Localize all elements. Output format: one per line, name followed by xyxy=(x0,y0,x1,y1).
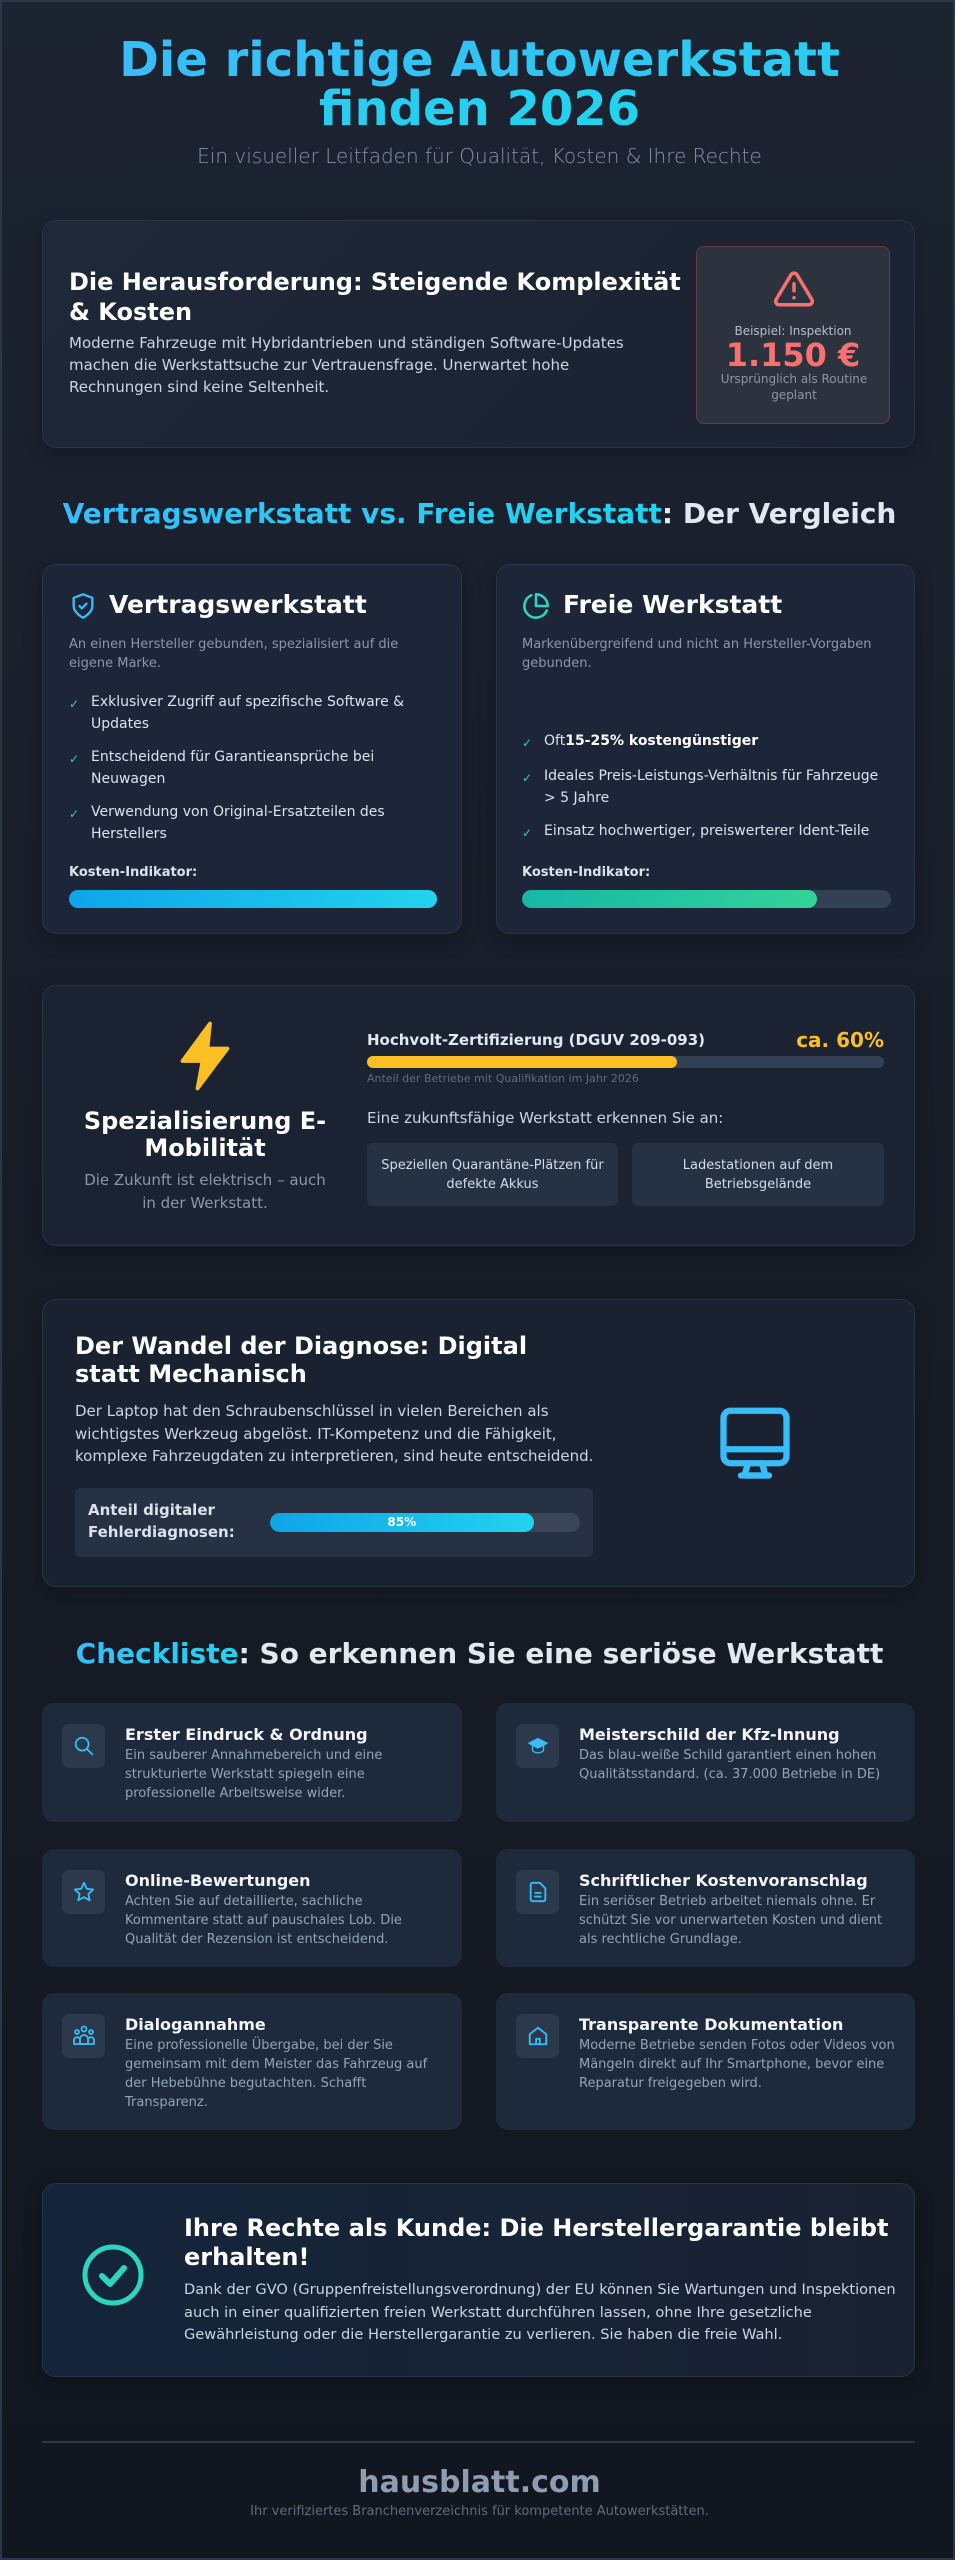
box: quarantine xyxy=(367,1143,618,1206)
panel: diagnosis xyxy=(42,1299,915,1587)
description: An einen Hersteller gebunden, spezialisiert auf die eigene Marke. xyxy=(69,637,398,671)
icon: people xyxy=(62,2014,105,2058)
checklist card: estimate xyxy=(496,1849,915,1967)
checklist card: dialogue: Dialogannahme xyxy=(125,2015,266,2034)
checklist card: master sign: Meisterschild der Kfz-Innung xyxy=(579,1725,840,1744)
challenge text: Moderne Fahrzeuge mit Hybridantrieben und ständigen Software-Updates machen die Werkstattsuche zur Vertrauensfrage. Unerwartet hohe Rechnungen sind keine Seltenheit. xyxy=(69,334,624,396)
checklist card: dialogue xyxy=(42,1993,462,2130)
subtitle: Ein visueller Leitfaden für Qualität, Kosten & Ihre Rechte xyxy=(197,144,762,168)
cost indicator xyxy=(522,865,891,908)
icon: graduation cap xyxy=(516,1724,559,1768)
checklist card: first impression: Ein sauberer Annahmebereich und eine strukturierte Werkstatt spiegeln eine professionelle Arbeitsweise wider. xyxy=(125,1748,382,1801)
icon: warning xyxy=(774,271,814,306)
checklist card: documentation: Transparente Dokumentation xyxy=(579,2015,843,2034)
callout: inspection cost: Ursprünglich als Routine geplant xyxy=(721,372,867,402)
callout: inspection cost: Beispiel: Inspektion xyxy=(734,324,852,338)
list xyxy=(524,733,878,839)
footer text: Ihr verifiziertes Branchenverzeichnis für kompetente Autowerkstätten. xyxy=(250,2504,709,2519)
chart: digital diagnosis share: 85% xyxy=(387,1515,416,1529)
diagnosis heading: Der Wandel der Diagnose: Digital statt Mechanisch xyxy=(75,1332,527,1388)
list: Einsatz hochwertiger, preiswerterer Ident-Teile xyxy=(544,823,869,839)
panel: challenge xyxy=(42,220,915,448)
checklist card: reviews: Online-Bewertungen xyxy=(125,1871,311,1890)
list: Verwendung von Original-Ersatzteilen des Herstellers xyxy=(91,804,385,842)
icon: house xyxy=(516,2014,559,2058)
checklist card: master sign: Das blau-weiße Schild garantiert einen hohen Qualitätsstandard. (ca. 37.000 Betriebe in DE) xyxy=(579,1748,880,1782)
icon: document xyxy=(516,1870,559,1914)
callout: inspection cost xyxy=(696,246,890,424)
heading: Freie Werkstatt xyxy=(563,590,782,619)
challenge heading: Die Herausforderung: Steigende Komplexität & Kosten xyxy=(69,268,681,326)
icon: check circle xyxy=(82,2244,144,2306)
checklist card: reviews: Achten Sie auf detaillierte, sachliche Kommentare statt auf pauschales Lob. Die Qualität der Rezension ist entscheidend. xyxy=(125,1894,402,1947)
list: Oft15-25% kostengünstiger xyxy=(544,733,758,749)
icon: pie chart xyxy=(523,593,549,619)
icon: star xyxy=(62,1870,105,1914)
list xyxy=(70,694,404,842)
chart: digital diagnosis share xyxy=(75,1488,593,1557)
panel: customer rights xyxy=(42,2183,915,2377)
e-mobility subtitle: Die Zukunft ist elektrisch – auch in der Werkstatt. xyxy=(84,1171,326,1212)
cost indicator: Kosten-Indikator: xyxy=(69,865,197,880)
chart: digital diagnosis share: Anteil digitaler xyxy=(88,1501,215,1519)
box: charging: Ladestationen auf dem Betriebsgelände xyxy=(683,1158,833,1192)
checklist card: estimate: Ein seriöser Betrieb arbeitet niemals ohne. Er schützt Sie vor unerwarteten Kosten und dient als rechtliche Grundlage. xyxy=(579,1894,882,1947)
checklist card: first impression: Erster Eindruck & Ordnung xyxy=(125,1725,368,1744)
diagnosis text: Der Laptop hat den Schraubenschlüssel in vielen Bereichen als wichtigstes Werkzeug abgelöst. IT-Kompetenz und die Fähigkeit, komplexe Fahrzeugdaten zu interpretieren, sind heute entscheidend. xyxy=(75,1402,593,1465)
heading: comparison: Vertragswerkstatt vs. Freie Werkstatt: Der Vergleich xyxy=(63,497,896,530)
list: Entscheidend für Garantieansprüche bei Neuwagen xyxy=(91,749,374,787)
checklist card: dialogue: Eine professionelle Übergabe, bei der Sie gemeinsam mit dem Meister das Fahrzeug auf der Hebebühne begutachten. Schafft Transparenz. xyxy=(125,2038,427,2110)
checklist card: estimate: Schriftlicher Kostenvoranschlag xyxy=(579,1871,868,1890)
callout: inspection cost: 1.150 € xyxy=(726,336,860,374)
cost indicator: Kosten-Indikator: xyxy=(522,865,650,880)
checklist card: documentation xyxy=(496,1993,915,2130)
description: Markenübergreifend und nicht an Hersteller-Vorgaben gebunden. xyxy=(522,637,872,671)
panel: Freie Werkstatt xyxy=(496,564,915,934)
rights heading: Ihre Rechte als Kunde: Die Herstellergarantie bleibt erhalten! xyxy=(184,2214,888,2271)
text: recognise: Eine zukunftsfähige Werkstatt erkennen Sie an: xyxy=(367,1109,723,1127)
cost indicator xyxy=(69,865,437,908)
title xyxy=(119,32,840,137)
rights text: Dank der GVO (Gruppenfreistellungsverordnung) der EU können Sie Wartungen und Inspektionen auch in einer qualifizierten freien Werkstatt durchführen lassen, ohne Ihre gesetzliche Gewährleistung oder die Herstellergarantie zu verlieren. Sie haben die freie Wahl. xyxy=(184,2281,896,2343)
checklist card: reviews xyxy=(42,1849,462,1967)
list: Ideales Preis-Leistungs-Verhältnis für Fahrzeuge > 5 Jahre xyxy=(544,768,878,806)
icon: lightning bolt xyxy=(180,1022,230,1090)
footer brand: hausblatt.com xyxy=(358,2465,601,2500)
icon: shield xyxy=(72,593,94,619)
checklist card: first impression xyxy=(42,1703,462,1822)
chart: HV certification: Hochvolt-Zertifizierung (DGUV 209-093) xyxy=(367,1031,705,1049)
title: finden 2026 xyxy=(319,81,640,137)
checklist card: master sign xyxy=(496,1703,915,1822)
icon: search xyxy=(62,1724,105,1768)
icon: monitor xyxy=(720,1408,790,1479)
chart: digital diagnosis share: Fehlerdiagnosen: xyxy=(88,1523,235,1541)
panel: Vertragswerkstatt xyxy=(42,564,462,934)
box: charging xyxy=(632,1143,884,1206)
heading: checklist: Checkliste: So erkennen Sie eine seriöse Werkstatt xyxy=(76,1637,883,1670)
box: quarantine: Speziellen Quarantäne-Plätzen für defekte Akkus xyxy=(381,1158,604,1192)
e-mobility heading: Spezialisierung E-Mobilität xyxy=(84,1107,326,1162)
chart: HV certification: Anteil der Betriebe mit Qualifikation im Jahr 2026 xyxy=(367,1072,639,1085)
panel: e-mobility xyxy=(42,985,915,1246)
list: Exklusiver Zugriff auf spezifische Software & Updates xyxy=(91,694,404,732)
checklist card: documentation: Moderne Betriebe senden Fotos oder Videos von Mängeln direkt auf Ihr Smartphone, bevor eine Reparatur freigegeben wird. xyxy=(579,2038,895,2091)
chart: HV certification: ca. 60% xyxy=(796,1028,884,1052)
title: Die richtige Autowerkstatt xyxy=(119,32,840,88)
chart: HV certification xyxy=(367,1028,884,1085)
heading: Vertragswerkstatt xyxy=(109,590,367,619)
